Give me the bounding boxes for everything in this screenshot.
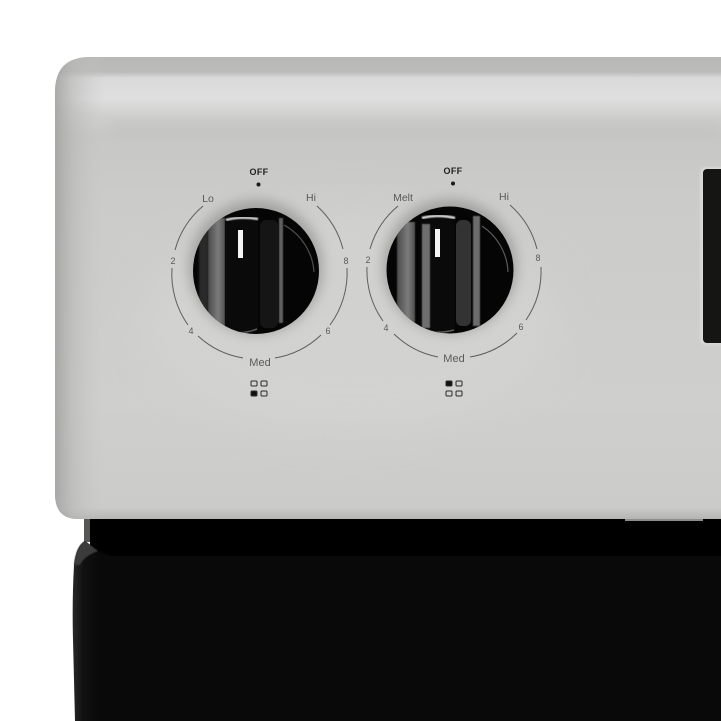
knob base (190, 205, 322, 337)
dial labels: 6 (518, 322, 524, 332)
rim highlight (284, 225, 314, 272)
rear highlight strip on panel base (625, 519, 703, 521)
dial labels (365, 166, 541, 365)
grip ridge (225, 220, 244, 333)
indicator line (238, 230, 243, 258)
dial labels: Med (249, 357, 271, 369)
grip top highlight (226, 218, 258, 220)
dial labels: Hi (499, 191, 509, 203)
grip bottom highlight (240, 328, 258, 333)
door corner highlight (74, 541, 98, 565)
shadow round first knob (189, 200, 323, 334)
dial labels: Med (443, 353, 465, 365)
display window (700, 167, 721, 345)
shadow round second knob (383, 199, 517, 333)
dial labels: OFF (250, 167, 269, 177)
brushed steel glow (140, 210, 560, 430)
grip bottom highlight (423, 330, 454, 332)
side sliver below panel (84, 518, 90, 542)
dial labels: 8 (343, 256, 349, 266)
right rib (260, 220, 278, 328)
right grey line (279, 218, 283, 323)
dial scale arcs (367, 205, 541, 357)
door body lower shade (100, 556, 721, 721)
display glow edge (700, 167, 721, 345)
dial labels: 2 (170, 256, 176, 266)
grip top highlight (422, 216, 455, 218)
grip side reflection (422, 224, 430, 328)
indicator line (435, 229, 440, 257)
burner position icon (446, 381, 462, 396)
left grey reflection (397, 222, 415, 327)
off marker dot (451, 182, 455, 186)
off marker dot (256, 182, 260, 186)
dial labels: 4 (188, 326, 194, 336)
dial labels: 6 (325, 326, 331, 336)
knob base (384, 204, 516, 336)
dial labels: 8 (535, 253, 541, 263)
grip ridge (420, 326, 442, 333)
dial labels: 4 (383, 323, 389, 333)
left knob (190, 205, 322, 337)
burner position icon (251, 381, 267, 396)
stainless steel panel (55, 57, 721, 519)
right knob (384, 204, 516, 336)
dial labels: Melt (393, 192, 413, 204)
dial labels (170, 167, 349, 369)
dial labels: Hi (306, 192, 316, 204)
right rib (456, 220, 471, 326)
dial labels: 2 (365, 255, 371, 265)
oven door and lower body (73, 515, 721, 721)
right grey line (473, 216, 480, 326)
dark band under the control panel (90, 515, 721, 560)
dial scale arcs (172, 206, 347, 358)
right dial (365, 166, 541, 396)
control panel (55, 57, 721, 519)
dial labels: Lo (202, 193, 214, 205)
rim highlight (482, 226, 508, 272)
left edge shading (55, 57, 105, 519)
left dial (170, 167, 349, 396)
oven door (73, 541, 721, 721)
darker brushed band (110, 122, 721, 136)
dial labels: OFF (444, 166, 463, 176)
display glass (703, 169, 721, 343)
left grey reflection (198, 231, 208, 311)
